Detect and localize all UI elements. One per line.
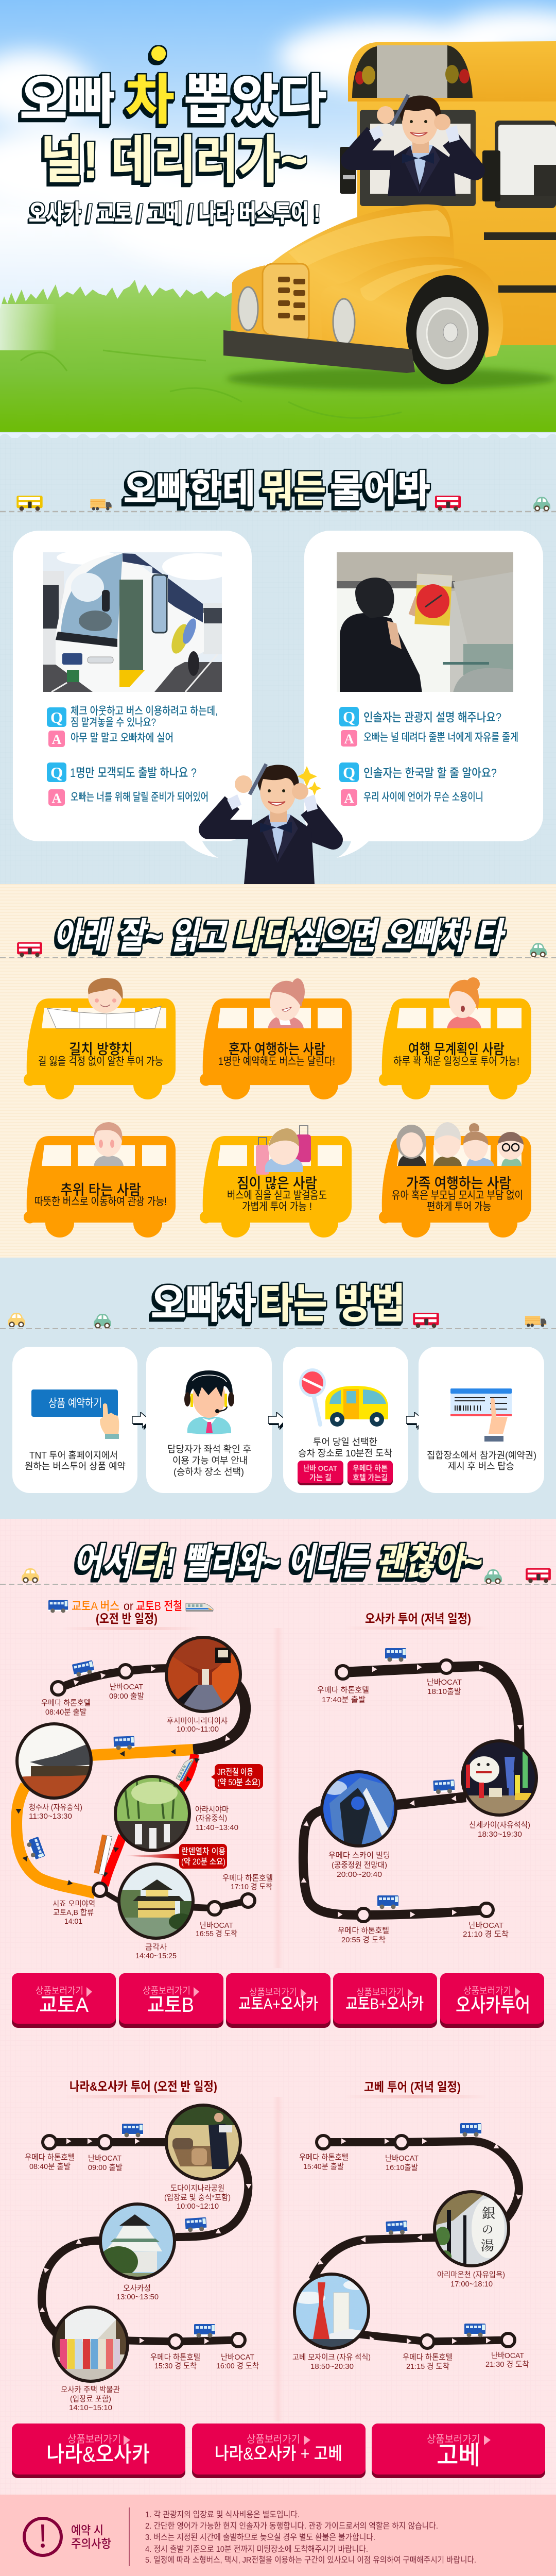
button: Namba OCAT route: 가는 길 (309, 1473, 332, 1482)
notes list (145, 2510, 476, 2565)
stop: Umeda Hotel arrival (150, 2335, 200, 2370)
callout: Randen tram: 란덴열차 이용 (181, 1846, 225, 1856)
title (20, 46, 327, 189)
button: Kyoto A: 상품보러가기 (36, 1986, 83, 1996)
card: no plan traveller (379, 977, 531, 1099)
stop: Umeda Hotel arrival: 우메다 하톤호텔 (150, 2353, 200, 2362)
answer 4: 우리 사이에 언어가 무슨 소용이니 (363, 791, 483, 803)
track (16, 1668, 248, 1908)
route heading (344, 2080, 488, 2098)
stop: Umeda Hotel: 우메다 하톤호텔 (299, 2153, 349, 2162)
stop: Umeda Hotel: 15:40분 출발 (303, 2162, 344, 2171)
stop: Namba OCAT: 18:10출발 (427, 1687, 461, 1696)
notes list: 1. 각 관광지의 입장료 및 식사비용은 별도입니다. (145, 2510, 300, 2519)
route heading: 교토B 전철 (136, 1599, 182, 1613)
question 4: Q (343, 764, 355, 782)
step 1: online booking (12, 1347, 137, 1493)
track (42, 2142, 248, 2342)
step 1: online booking: 상품 예약하기 (48, 1397, 102, 1410)
stop: Namba OCAT arrival: 난바OCAT (491, 2351, 524, 2360)
icon: warning (24, 2518, 61, 2555)
stop: Umeda Hotel departure: 08:40분 출발 (45, 1708, 86, 1717)
stop: Umeda Sky Building: 20:00~20:40 (337, 1870, 382, 1879)
notes heading: 예약 시 (71, 2523, 103, 2537)
answer 2: 오빠는 너를 위해 달릴 준비가 되어있어 (71, 791, 208, 803)
grass field (0, 280, 556, 433)
stop: Namba OCAT arrival (196, 1902, 237, 1938)
stop: Namba OCAT: 16:10출발 (386, 2163, 418, 2172)
arrow 2 (268, 1412, 288, 1430)
stop: Arima onsen (433, 2190, 510, 2289)
panel: left Q&A bubble (13, 531, 252, 858)
button: Kyoto B: 교토B (147, 1994, 194, 2016)
card: no plan traveller: 여행 무계획인 사람 (408, 1041, 505, 1057)
stop: Kobe Mosaic (292, 2273, 372, 2371)
panel: hero banner (0, 10, 556, 439)
answer 2 (48, 789, 208, 806)
stop: Umeda Hotel: 17:40분 출발 (322, 1696, 366, 1704)
stop: Nara park: 10:00~12:10 (177, 2202, 219, 2211)
stop: Osaka housing museum: (입장료 포함) (70, 2395, 111, 2403)
stop: Umeda Hotel departure: 우메다 하톤호텔 (41, 1699, 91, 1707)
step 2: seat confirmation (146, 1347, 272, 1493)
stop: Kinkakuji (117, 1862, 196, 1960)
stop: Shijo Omiya junction: 시죠 오미야역 (53, 1900, 95, 1908)
stop: Kinkakuji: 14:40~15:25 (135, 1952, 177, 1960)
stop: Namba OCAT arrival: 16:55 경 도착 (196, 1929, 237, 1938)
card: lots of luggage: 버스에 짐을 싣고 발걸음도 (227, 1190, 327, 1201)
button: Kobe (372, 2424, 545, 2478)
stop: Namba OCAT arrival: 난바OCAT (200, 1921, 233, 1930)
button: Kyoto B + Osaka: 상품보러가기 (356, 1987, 404, 1997)
route heading: 교토A 버스 (72, 1599, 119, 1613)
stop: Shijo Omiya junction: 교토A,B 합류 (53, 1908, 94, 1917)
clouds (0, 10, 556, 273)
stop: Namba OCAT arrival (485, 2333, 529, 2369)
callout: JR train: (약 50분 소요) (217, 1777, 260, 1787)
scalloped edge (0, 432, 556, 439)
card: no plan traveller: 하루 꽉 채운 일정으로 투어 가능! (393, 1056, 519, 1067)
stop: Umeda Hotel arrival: 우메다 하톤호텔 (222, 1874, 273, 1883)
button: Osaka tour: 오사카투어 (456, 1995, 530, 2016)
step 4: show ticket (419, 1347, 544, 1493)
button: Kobe: 상품보러가기 (427, 2433, 480, 2445)
answer 3: 오빠는 널 데려다 줄뿐 너에게 자유를 줄게 (363, 732, 518, 743)
button: Kyoto B + Osaka (333, 1973, 437, 2028)
step 2: seat confirmation: 이용 가능 여부 안내 (172, 1455, 248, 1466)
route vehicles (386, 2123, 485, 2337)
arrow 1 (132, 1412, 152, 1430)
stop: Kiyomizu temple: 청수사 (자유중식) (29, 1803, 82, 1812)
stop: Umeda Hotel (25, 2136, 75, 2171)
stop: Shijo Omiya junction (53, 1883, 107, 1926)
stop: Arima onsen: 아리마온천 (자유입욕) (437, 2270, 505, 2279)
product buttons row 2 (12, 2424, 545, 2478)
route vehicles (26, 1660, 195, 1875)
track direction arrows (301, 1664, 523, 1918)
stop: Arima onsen: 銀 (482, 2203, 495, 2222)
stop: Namba OCAT arrival: 난바OCAT (221, 2353, 254, 2362)
step 2: seat confirmation: (승하차 장소 선택) (173, 1467, 244, 1477)
notes list: 4. 정시 출발 기준으로 10분 전까지 미팅장소에 도착해주시기 바랍니다. (145, 2545, 368, 2554)
stop: Nara park (164, 2104, 242, 2211)
track (312, 2141, 519, 2342)
stop: Umeda Hotel arrival (403, 2335, 453, 2371)
answer 1: 아무 말 말고 오빠차에 실어 (71, 732, 173, 744)
button: Nara and Osaka (12, 2424, 185, 2478)
panel: Nara and Osaka tour route (25, 2080, 259, 2412)
notes heading: 주의사항 (71, 2537, 111, 2550)
bus hood and wheel (223, 205, 503, 384)
stop: Osaka housing museum: 14:10~15:10 (69, 2403, 112, 2412)
heading: read carefully: 아래 잘~ 읽고 (54, 916, 228, 956)
notes list: 5. 일정에 따라 소형버스, 택시, JR전철을 이용하는 구간이 있사오니 이점 유의하여 구매해주시기 바랍니다. (145, 2555, 476, 2565)
route heading: 오사카 투어 (저녁 일정) (365, 1612, 471, 1626)
stop: Namba OCAT departure: 난바OCAT (110, 1683, 143, 1691)
step 3: arrive at boarding place: 투어 당일 선택한 (313, 1437, 377, 1447)
question 1: Q (50, 708, 63, 726)
stop: Fushimi Inari: 후시미이나리타이샤 (167, 1717, 228, 1725)
step 2: seat confirmation: 담당자가 좌석 확인 후 (167, 1444, 251, 1454)
stop: Nara park: 도다이지나라공원 (170, 2184, 224, 2193)
answer 2: A (52, 791, 62, 806)
footer: booking notes (24, 2507, 476, 2566)
heading: hop on quickly: 괜찮아~ (376, 1541, 482, 1583)
button: Osaka tour (440, 1973, 544, 2028)
stop: Umeda Hotel arrival: 20:55 경 도착 (341, 1936, 386, 1944)
card: solo traveller: 1명만 예약해도 버스는 달린다! (218, 1056, 335, 1067)
stop: Namba OCAT arrival: 난바OCAT (468, 1921, 503, 1930)
heading: ask oppa anything (124, 468, 430, 511)
button: Kyoto A + Osaka: 상품보러가기 (249, 1987, 297, 1997)
button: Kyoto B + Osaka: 교토B+오사카 (345, 1995, 424, 2013)
man in bus window (351, 95, 475, 215)
stop: Namba OCAT (427, 1660, 462, 1696)
card: lots of luggage: 짐이 많은 사람 (237, 1175, 317, 1191)
card: sensitive to cold (24, 1122, 176, 1238)
notes list: 2. 간단한 영어가 가능한 현지 인솔자가 동행합니다. 관광 가이드로서의 역할은 하지 않습니다. (145, 2521, 438, 2531)
step 1: online booking: TNT 투어 홈페이지에서 (29, 1450, 118, 1461)
button: Umeda Hotel route: 우메다 하톤 (353, 1464, 388, 1473)
stop: Umeda Sky Building (320, 1770, 397, 1879)
callout: Randen tram (123, 1844, 227, 1869)
route heading: 나라&오사카 투어 (오전 반 일정) (70, 2080, 217, 2094)
button: Nara and Osaka: 나라&오사카 (46, 2442, 150, 2466)
stop: Umeda Sky Building: (공중정원 전망대) (332, 1861, 387, 1870)
stop: Namba OCAT arrival (216, 2333, 259, 2370)
stop: Osaka housing museum (52, 2306, 129, 2412)
heading: how to ride: 오빠차 (151, 1281, 256, 1327)
stop: Umeda Hotel departure (41, 1682, 91, 1717)
card: map reader (24, 978, 176, 1099)
callout: JR train: JR전철 이용 (217, 1767, 253, 1777)
card: map reader: 길 잃을 걱정 없이 알찬 투어 가능 (38, 1056, 163, 1067)
heading: read carefully: 나다 (233, 916, 294, 956)
answer 4 (341, 789, 483, 806)
stop: Kobe Mosaic: 고베 모자이크 (자유 석식) (292, 2353, 371, 2362)
stop: Shinsekai: 18:30~19:30 (478, 1830, 522, 1839)
road with vehicles 1 (0, 496, 556, 512)
notes list: 3. 버스는 지정된 시간에 출발하므로 늦으실 경우 별도 환불은 불가합니다. (145, 2533, 375, 2542)
stop: Arashiyama: 아라시야마 (195, 1805, 229, 1814)
stop: Umeda Hotel arrival: 15:30 경 도착 (154, 2362, 197, 2370)
step 4: show ticket: 제시 후 버스 탑승 (448, 1461, 514, 1471)
card: sensitive to cold: 따뜻한 버스로 이동하여 관광 가능! (34, 1196, 167, 1208)
answer 4: A (344, 791, 354, 806)
panel: right Q&A bubble (304, 531, 543, 858)
button: Nara and Osaka plus Kobe (192, 2424, 366, 2478)
stop: Namba OCAT arrival: 21:30 경 도착 (485, 2360, 529, 2369)
route heading: 고베 투어 (저녁 일정) (364, 2080, 461, 2094)
card: lots of luggage (200, 1126, 352, 1238)
question 2 (47, 762, 197, 782)
card: family travel: 가족 여행하는 사람 (406, 1175, 511, 1191)
title: 오빠 (20, 71, 115, 130)
road with vehicles 3 (0, 1313, 556, 1329)
stop: Fushimi Inari (165, 1636, 242, 1734)
stop: Arima onsen: の (482, 2221, 493, 2237)
heading: read carefully (54, 916, 506, 956)
button: Nara and Osaka: 상품보러가기 (67, 2433, 121, 2445)
panel: Kyoto tour route (15, 1599, 273, 1960)
route heading (48, 1599, 213, 1630)
stop: Namba OCAT: 난바OCAT (427, 1678, 462, 1687)
stop: Nara park: (입장료 및 중식*포함) (164, 2193, 231, 2202)
button: Kyoto A + Osaka: 교토A+오사카 (238, 1995, 318, 2013)
step 3: arrive at boarding place: 승차 장소로 10분전 도착 (298, 1448, 392, 1459)
stop: Umeda Hotel (299, 2136, 349, 2171)
stop: Umeda Hotel: 08:40분 출발 (29, 2162, 71, 2171)
subtitle: 오사카 / 교토 / 고베 / 나라 버스투어 ! (29, 200, 320, 227)
stop: Umeda Sky Building: 우메다 스카이 빌딩 (328, 1851, 390, 1860)
notes heading (71, 2523, 111, 2550)
step 1: online booking: 원하는 버스투어 상품 예약 (25, 1461, 126, 1471)
stop: Namba OCAT departure: 09:00 출발 (109, 1692, 144, 1701)
stop: Fushimi Inari: 10:00~11:00 (177, 1725, 219, 1734)
button: Namba OCAT route (298, 1461, 343, 1485)
stop: Kiyomizu temple (15, 1723, 93, 1821)
stop: Namba OCAT arrival (463, 1903, 509, 1939)
stop: Umeda Hotel arrival: 17:10 경 도착 (231, 1883, 272, 1891)
button: Osaka tour: 상품보러가기 (463, 1986, 511, 1996)
stop: Umeda Hotel arrival: 우메다 하톤호텔 (403, 2353, 453, 2362)
heading: hop on quickly: 타 (132, 1541, 168, 1583)
school bus (340, 41, 556, 345)
button: Kyoto A: 교토A (39, 1994, 89, 2016)
card: lots of luggage: 가볍게 투어 가능 ! (242, 1201, 312, 1213)
stop: Umeda Hotel (317, 1666, 369, 1704)
question 4 (339, 762, 497, 782)
question 4: 인솔자는 한국말 할 줄 알아요? (363, 766, 497, 779)
stop: Namba OCAT arrival: 21:10 경 도착 (463, 1930, 509, 1939)
stop: Namba OCAT: 난바OCAT (385, 2154, 419, 2163)
heading: how to ride (151, 1281, 405, 1327)
shadow under bus (227, 367, 556, 390)
button: Namba OCAT route: 난바 OCAT (303, 1464, 337, 1473)
card: solo traveller (200, 978, 352, 1099)
stop: Kiyomizu temple: 11:30~13:30 (29, 1812, 72, 1821)
card: map reader: 길치 방향치 (69, 1041, 133, 1057)
route heading: (오전 반 일정) (96, 1612, 158, 1626)
title: 뽑았다 (184, 71, 327, 130)
answer 1: A (52, 732, 62, 747)
answer 1 (48, 731, 173, 747)
button: Kobe: 고베 (437, 2441, 480, 2470)
heading: ask oppa anything: 물어봐 (330, 468, 430, 511)
question 3 (339, 707, 501, 726)
question 3: Q (343, 708, 355, 726)
heading: read carefully: 싶으면 오빠차 타 (293, 916, 506, 956)
heading: hop on quickly (73, 1541, 482, 1583)
stop: Kinkakuji: 금각사 (145, 1943, 167, 1952)
route heading: or (124, 1599, 133, 1613)
arrow 3 (406, 1412, 426, 1430)
callout: Randen tram: (약 20분 소요) (181, 1857, 225, 1867)
button: Nara and Osaka plus Kobe: 상품보러가기 (247, 2433, 300, 2445)
man with comb and sparkles (208, 764, 333, 884)
stop: Umeda Hotel arrival: 21:15 경 도착 (406, 2362, 449, 2371)
answer 3 (341, 730, 518, 747)
button: Nara and Osaka plus Kobe: 나라&오사카 + 고베 (215, 2444, 342, 2464)
track (303, 1666, 519, 1915)
route heading (64, 2080, 217, 2098)
question 2: Q (50, 764, 63, 782)
stop: Namba OCAT: 09:00 출발 (88, 2163, 123, 2172)
stop: Shijo Omiya junction: 14:01 (64, 1917, 82, 1926)
stop: Umeda Hotel: 우메다 하톤호텔 (25, 2153, 75, 2162)
question 3: 인솔자는 관광지 설명 해주나요? (363, 710, 501, 724)
road with vehicles 4 (0, 1568, 556, 1584)
stop: Arashiyama: (자유중식) (196, 1814, 227, 1823)
stop: Osaka housing museum: 오사카 주택 박물관 (61, 2385, 120, 2394)
stop: Umeda Hotel arrival (338, 1908, 389, 1944)
stop: Osaka castle: 13:00~13:50 (116, 2293, 159, 2301)
stop: Arima onsen: 湯 (481, 2235, 494, 2255)
card: sensitive to cold: 추위 타는 사람 (60, 1182, 141, 1198)
stop: Umeda Hotel arrival: 우메다 하톤호텔 (338, 1926, 389, 1935)
step 3: arrive at boarding place (283, 1347, 408, 1493)
heading: how to ride: 타는 방법 (259, 1281, 405, 1327)
route vehicles (122, 2124, 215, 2338)
stop: Umeda Hotel arrival (222, 1874, 273, 1907)
heading: ask oppa anything: 오빠한테 (124, 468, 255, 511)
heading: hop on quickly: ! 빨리와~ 어디든 (166, 1541, 370, 1583)
stop: Arima onsen: 17:00~18:10 (450, 2280, 493, 2289)
heading: ask oppa anything: 뭐든 (261, 468, 326, 511)
panel: Kobe tour route (292, 2080, 529, 2371)
callout: JR train (211, 1764, 263, 1789)
stop: Osaka castle (99, 2202, 176, 2301)
button: Kyoto B (119, 1973, 223, 2028)
button: Kyoto A + Osaka (226, 1973, 331, 2028)
stop: Umeda Hotel: 우메다 하톤호텔 (317, 1686, 369, 1694)
card: family travel: 편하게 투어 가능 (427, 1201, 491, 1213)
panel: Osaka tour route (301, 1612, 538, 1944)
question 1: 체크 아웃하고 버스 이용하려고 하는데, (71, 705, 218, 717)
track direction arrows (39, 2138, 251, 2344)
answer 3: A (344, 732, 354, 747)
photo: tour bus (43, 550, 234, 692)
card: family travel (379, 1122, 531, 1238)
stop: Namba OCAT (88, 2136, 123, 2172)
track direction arrows (318, 2138, 523, 2344)
photo: guide inside bus (337, 552, 513, 693)
stop: Arashiyama: 11:40~13:40 (196, 1823, 238, 1832)
question 2: 1명만 모객되도 출발 하나요 ? (70, 766, 197, 780)
route heading (345, 1612, 489, 1630)
card: family travel: 유아 혹은 부모님 모시고 부담 없이 (392, 1190, 523, 1201)
button: Kyoto B: 상품보러가기 (143, 1986, 190, 1996)
stop: Arashiyama (113, 1775, 238, 1852)
title: 차 (125, 71, 175, 130)
stop: Namba OCAT departure (109, 1665, 144, 1701)
question 1: 짐 맡겨놓을 수 있나요? (71, 717, 156, 728)
button: Umeda Hotel route (348, 1461, 393, 1485)
stop: Namba OCAT (385, 2136, 419, 2172)
title: 널! 데리러가~ (41, 131, 307, 189)
stop: Namba OCAT arrival: 16:00 경 도착 (216, 2362, 259, 2370)
road with vehicles 2 (0, 942, 556, 958)
heading: hop on quickly: 어서 (73, 1541, 135, 1583)
card: solo traveller: 혼자 여행하는 사람 (229, 1041, 325, 1057)
step 4: show ticket: 집합장소에서 참가권(예약권) (427, 1450, 536, 1461)
track direction arrows (15, 1666, 231, 1887)
stop: Kobe Mosaic: 18:50~20:30 (310, 2362, 354, 2371)
product buttons row 1 (12, 1973, 544, 2028)
route vehicles (377, 1648, 455, 1909)
question 1 (47, 705, 218, 728)
stop: Shinsekai: 신세카이(자유석식) (469, 1821, 530, 1829)
button: Kyoto A (12, 1973, 116, 2028)
stop: Osaka castle: 오사카성 (123, 2284, 151, 2293)
stop: Namba OCAT: 난바OCAT (88, 2154, 121, 2163)
stop: Shinsekai (461, 1739, 538, 1839)
button: Umeda Hotel route: 호텔 가는길 (353, 1473, 388, 1482)
